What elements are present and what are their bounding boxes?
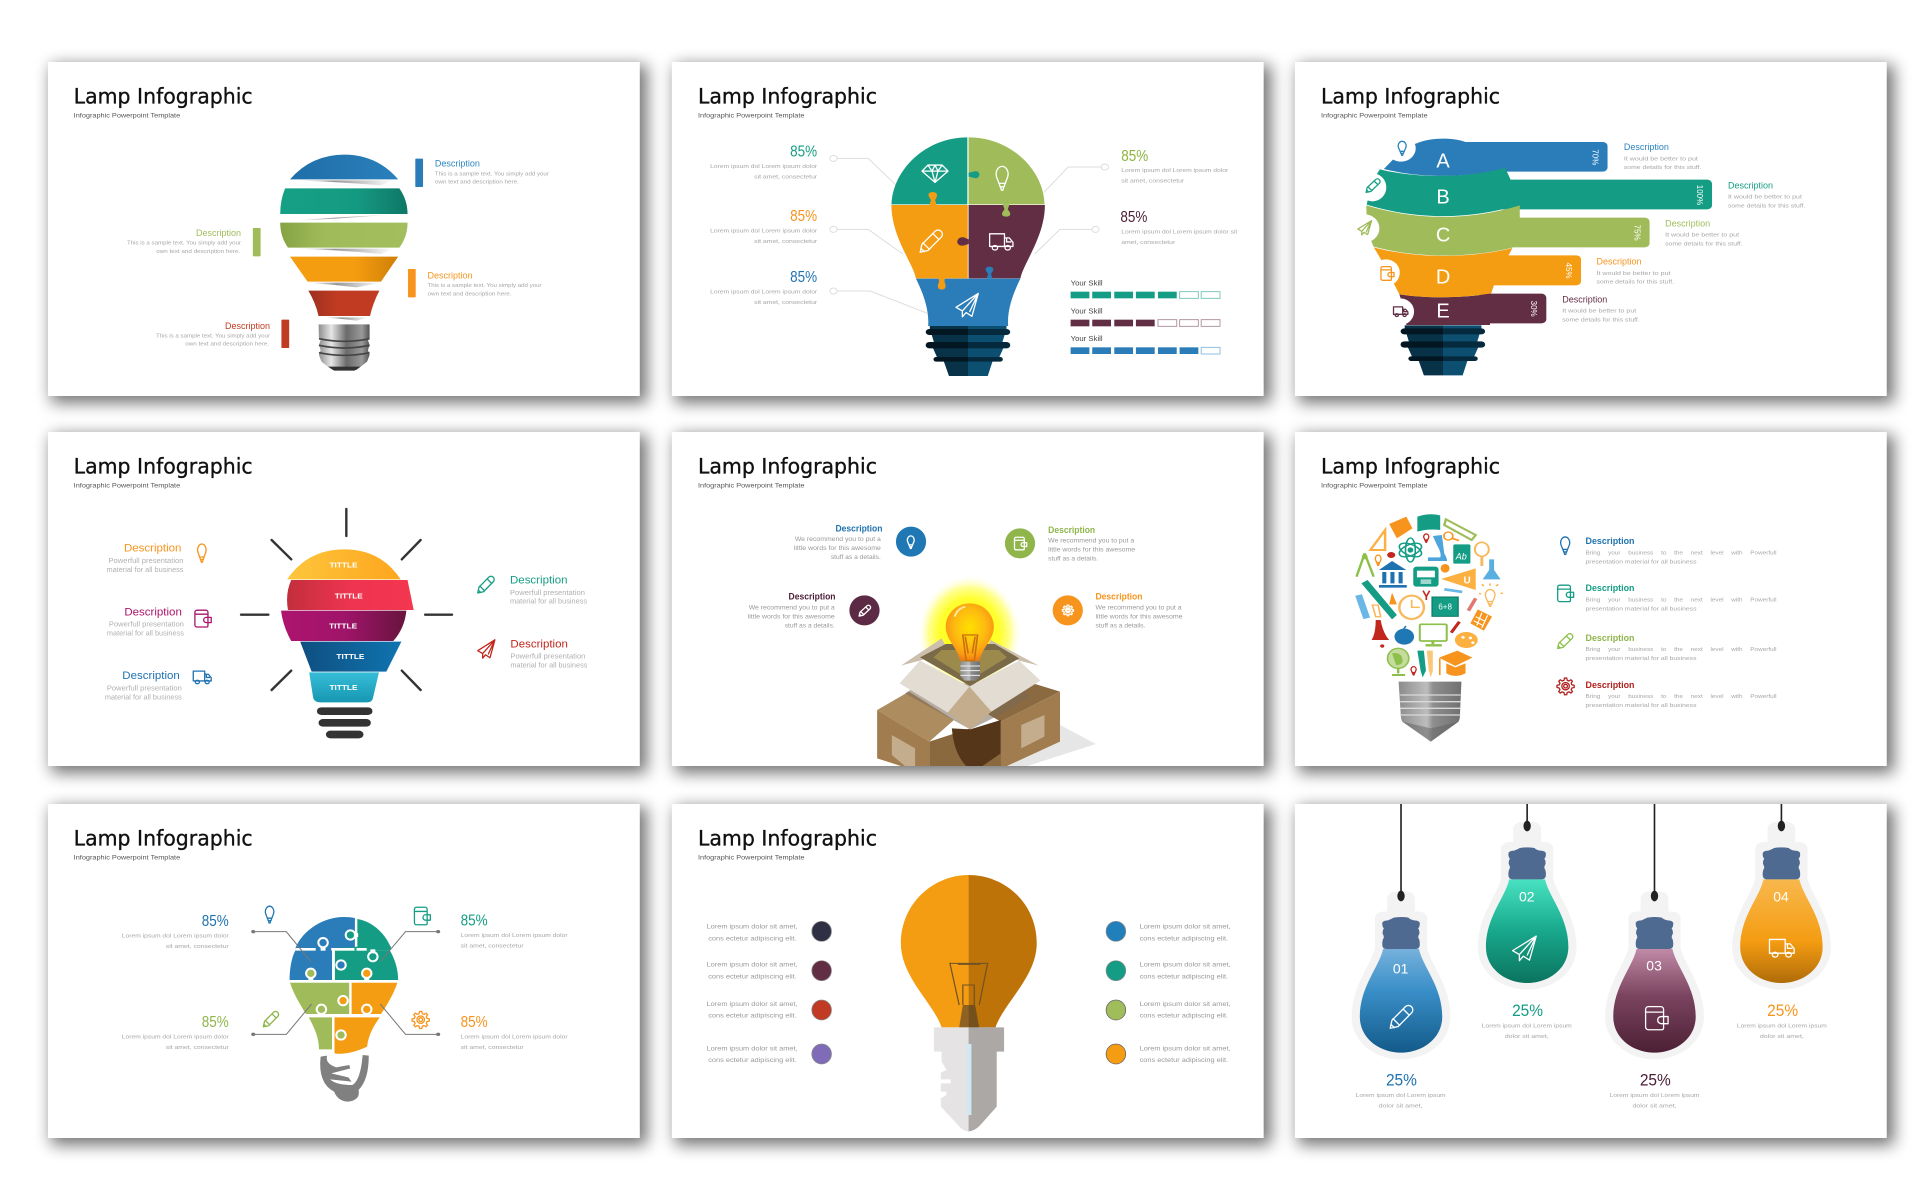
stat 03: Lorem ipsum dol Lorem ipsum <box>1609 1093 1700 1099</box>
hanging bulb 01 <box>1360 804 1442 1053</box>
description: red <box>510 638 588 669</box>
description: magenta: material for all business <box>107 631 184 638</box>
bulb socket <box>926 326 1010 376</box>
stat: green: sit amet, consectetur <box>1121 179 1184 185</box>
description: red: Description <box>510 638 568 650</box>
segment labels: TITTLE <box>329 683 357 692</box>
description: teal <box>510 575 588 606</box>
skill bar: blue: Your Skill <box>1071 336 1103 343</box>
stat: orange: 85% <box>461 1014 488 1031</box>
bar labels: D <box>1436 266 1450 288</box>
icon: bulb <box>996 166 1008 190</box>
description: blue <box>105 670 182 701</box>
legend left 4: Lorem ipsum dolor sit amet, <box>707 1045 798 1052</box>
legend left 3 <box>707 1000 831 1020</box>
icon: gear <box>412 1011 429 1029</box>
title: Lamp Infographic <box>1321 84 1500 108</box>
hanging bulb 01: 01 <box>1393 960 1409 976</box>
stat: blue: Lorem ipsum dol Lorem ipsum dolor <box>710 289 817 295</box>
stat: blue: 85% <box>790 269 817 286</box>
callout: green description <box>127 228 261 256</box>
stat: orange: Lorem ipsum dol Lorem ipsum dolor <box>461 1034 568 1040</box>
item: green description: presentation material for all business <box>1586 656 1697 662</box>
stat: green: Lorem ipsum dol Lorem ipsum dolor <box>122 1034 229 1040</box>
description: red: material for all business <box>510 662 588 669</box>
hanging bulb 02 <box>1486 804 1568 983</box>
description: orange <box>1096 592 1183 629</box>
description B: It would be better to put <box>1728 195 1802 201</box>
item: teal description: presentation material for all business <box>1586 606 1697 612</box>
description: blue: material for all business <box>105 694 182 701</box>
stacked bulb <box>281 549 414 738</box>
icon: diamond <box>922 165 948 182</box>
description E: Description <box>1562 294 1607 304</box>
segment labels: TITTLE <box>335 591 363 600</box>
description: teal: material for all business <box>510 599 588 606</box>
puzzle bulb <box>891 137 1045 326</box>
description: orange: material for all business <box>106 567 184 574</box>
stat: teal: 85% <box>790 144 817 161</box>
stat 03: dolor sit amet, <box>1632 1104 1677 1110</box>
description: orange: stuff as a details. <box>1096 622 1146 629</box>
legend right 3 <box>1106 1000 1231 1020</box>
stat: teal: 85% <box>461 913 488 930</box>
icon: bulb <box>198 544 206 562</box>
description B: some details for this stuff. <box>1728 204 1806 210</box>
legend left 2 <box>707 961 831 981</box>
description C <box>1665 218 1743 247</box>
bar labels: 75% <box>1632 225 1641 241</box>
segment labels: TITTLE <box>329 621 357 630</box>
subtitle: Infographic Powerpoint Template <box>698 855 805 862</box>
description: plum <box>748 592 836 629</box>
description D: Description <box>1597 257 1642 267</box>
icon: wallet <box>414 907 430 925</box>
item: red description: presentation material for all business <box>1586 703 1697 709</box>
stat 04: 25% <box>1767 1002 1798 1020</box>
legend left 2: cons ectetur adipiscing elit. <box>708 973 797 980</box>
icon: small bulbs <box>1375 534 1495 675</box>
stat: teal: sit amet, consectetur <box>461 944 524 950</box>
description: orange <box>106 543 184 574</box>
description: plum: little words for this awesome <box>748 613 835 620</box>
stat: plum: Lorem ipsum dol Lorem ipsum dolor sit <box>1121 229 1238 235</box>
legend right 4: Lorem ipsum dolor sit amet, <box>1140 1045 1231 1052</box>
skill bar: teal: Your Skill <box>1071 280 1103 287</box>
segment labels: TITTLE <box>329 561 357 570</box>
stat 04: Lorem ipsum dol Lorem ipsum <box>1737 1023 1827 1029</box>
callout: red description: Description <box>225 321 270 331</box>
description D: some details for this stuff. <box>1597 280 1674 286</box>
legend right 4: cons ectetur adipiscing elit. <box>1140 1057 1228 1064</box>
stat: orange: Lorem ipsum dol Lorem ipsum dolor <box>710 228 817 234</box>
bulb layers <box>1350 135 1520 325</box>
item: red description: Description <box>1586 680 1635 690</box>
bar labels: A <box>1436 150 1450 172</box>
item: teal description: Description <box>1586 583 1635 593</box>
callout: blue description: own text and description here. <box>435 180 519 186</box>
item: green description <box>1558 633 1777 662</box>
description: red: Powerfull presentation <box>510 654 586 661</box>
bulb screw base <box>1399 682 1461 742</box>
stat: orange: sit amet, consectetur <box>461 1045 524 1051</box>
stat 01 <box>1356 1072 1446 1110</box>
key-shaped bulb <box>901 875 1037 1131</box>
callout: red description: own text and description here. <box>185 342 270 348</box>
title: Lamp Infographic <box>74 826 253 850</box>
subtitle: Infographic Powerpoint Template <box>74 113 181 120</box>
panel: stacked TITTLE bulb with rays <box>48 432 640 766</box>
stat 03 <box>1609 1072 1700 1110</box>
icon: bulb <box>1398 141 1406 155</box>
description: blue: stuff as a details. <box>831 554 881 561</box>
item: green description: Bring your business to the next level with Powerfull <box>1586 647 1777 653</box>
hanging bulb 04 <box>1740 804 1823 983</box>
cardboard box and bulb <box>877 576 1096 766</box>
description C: some details for this stuff. <box>1665 241 1743 247</box>
panel: school icons bulb <box>1295 432 1887 766</box>
callout: red description <box>156 320 289 348</box>
description: blue: little words for this awesome <box>794 545 881 552</box>
legend left 4 <box>707 1044 831 1064</box>
subtitle: Infographic Powerpoint Template <box>1321 113 1428 120</box>
stat 03: 25% <box>1640 1072 1671 1090</box>
legend right 1: cons ectetur adipiscing elit. <box>1140 935 1228 942</box>
title: Lamp Infographic <box>74 454 253 478</box>
skill bar: blue <box>1071 336 1220 354</box>
item: teal description <box>1558 583 1777 612</box>
panel: A to E bulb bars <box>1295 62 1887 396</box>
icon: paper plane <box>478 640 495 658</box>
panel: glowing bulb in cardboard box <box>672 432 1264 766</box>
stat 01: Lorem ipsum dol Lorem ipsum <box>1356 1093 1446 1099</box>
stat: teal <box>461 913 568 950</box>
stat: orange <box>710 208 817 245</box>
skill bar: plum: Your Skill <box>1071 308 1103 315</box>
panel: flat key bulb with dot legend <box>672 804 1264 1138</box>
legend right 2: Lorem ipsum dolor sit amet, <box>1140 962 1231 969</box>
bar labels: 70% <box>1590 149 1599 165</box>
description A: It would be better to put <box>1624 156 1698 162</box>
screw base <box>320 1055 369 1102</box>
title: Lamp Infographic <box>698 84 877 108</box>
bar labels <box>1436 149 1704 323</box>
stat: green <box>122 1014 229 1051</box>
panel: hanging bulbs <box>1295 804 1887 1138</box>
connector lines <box>830 155 1109 313</box>
item: blue description: presentation material for all business <box>1586 559 1697 565</box>
subtitle: Infographic Powerpoint Template <box>74 855 181 862</box>
description: green: We recommend you to put a <box>1048 538 1135 545</box>
callout: blue description: Description <box>435 159 480 169</box>
icon: pencil <box>478 576 494 593</box>
legend right 3: cons ectetur adipiscing elit. <box>1140 1013 1228 1020</box>
legend left 1: cons ectetur adipiscing elit. <box>708 935 797 942</box>
stat: orange: 85% <box>790 208 817 225</box>
item: teal description: Bring your business to the next level with Powerfull <box>1586 597 1777 603</box>
subtitle: Infographic Powerpoint Template <box>698 113 805 120</box>
legend left 1: Lorem ipsum dolor sit amet, <box>707 924 798 931</box>
item: green description: Description <box>1586 633 1635 643</box>
description A <box>1624 142 1702 171</box>
stat: plum <box>1120 209 1238 246</box>
title: Lamp Infographic <box>74 84 253 108</box>
jigsaw bulb <box>290 917 398 1054</box>
item: blue description: Bring your business to the next level with Powerfull <box>1586 550 1777 556</box>
bar labels: 30% <box>1529 301 1538 317</box>
description C: It would be better to put <box>1665 233 1740 239</box>
segment labels: TITTLE <box>336 652 364 661</box>
stat 02 <box>1482 1002 1572 1040</box>
description: blue: Description <box>835 523 883 534</box>
bar labels: B <box>1436 186 1450 208</box>
hanging bulb 03: 03 <box>1646 958 1662 974</box>
icon: truck <box>990 234 1013 250</box>
bar labels: C <box>1436 225 1450 247</box>
description: plum: stuff as a details. <box>785 622 835 629</box>
legend right 4 <box>1106 1044 1231 1064</box>
description: orange: Description <box>1096 592 1143 603</box>
stat 01: dolor sit amet, <box>1379 1104 1423 1110</box>
stat: blue: sit amet, consectetur <box>754 300 817 306</box>
panel: puzzle bulb with skill bars <box>672 62 1264 396</box>
title: Lamp Infographic <box>698 454 877 478</box>
icon: pencil <box>1366 179 1380 192</box>
stat: blue: sit amet, consectetur <box>166 944 229 950</box>
icon cluster: Ab <box>1455 551 1467 561</box>
icon: paper plane <box>956 293 978 317</box>
description: orange: little words for this awesome <box>1096 613 1183 620</box>
legend right 1: Lorem ipsum dolor sit amet, <box>1140 924 1231 931</box>
description: blue: We recommend you to put a <box>795 536 881 543</box>
legend left 3: Lorem ipsum dolor sit amet, <box>707 1001 798 1008</box>
description: orange: Description <box>124 543 181 555</box>
item: red description <box>1557 678 1777 709</box>
icon: wallet <box>195 610 211 627</box>
description: teal: Powerfull presentation <box>510 590 585 597</box>
segment labels <box>329 561 364 692</box>
panel: jigsaw bulb with connectors <box>48 804 640 1138</box>
icon: wallet <box>1381 267 1394 280</box>
subtitle: Infographic Powerpoint Template <box>698 483 805 490</box>
bar labels: E <box>1436 301 1450 323</box>
icon: pencil <box>920 230 942 252</box>
description: magenta <box>107 606 184 638</box>
stat: plum: amet, consectetur <box>1121 240 1175 246</box>
description: blue: Powerfull presentation <box>107 685 182 692</box>
icon: pencil <box>263 1011 279 1027</box>
bar labels: 100% <box>1695 185 1704 205</box>
description B <box>1728 181 1806 210</box>
description E <box>1562 294 1640 323</box>
icon badge: orange gear <box>1053 595 1083 625</box>
description: orange: We recommend you to put a <box>1096 604 1182 611</box>
sliced bulb illustration <box>280 155 408 371</box>
stat: teal <box>710 144 817 181</box>
hanging bulb 02: 02 <box>1519 888 1535 904</box>
icon cluster: 6+8 <box>1438 602 1452 611</box>
stat: green: Lorem ipsum dol Lorem ipsum dolor <box>1121 168 1228 174</box>
stat 04 <box>1737 1002 1827 1040</box>
callout: orange description <box>408 269 542 297</box>
description D <box>1597 257 1674 286</box>
legend left 3: cons ectetur adipiscing elit. <box>708 1013 797 1020</box>
callout: green description: own text and description here. <box>156 249 241 255</box>
stat: orange <box>461 1014 568 1051</box>
bulb socket <box>1401 325 1485 375</box>
description: green <box>1048 525 1136 563</box>
stat 02: dolor sit amet, <box>1505 1034 1549 1040</box>
description E: some details for this stuff. <box>1562 317 1640 323</box>
description: plum: We recommend you to put a <box>749 604 835 611</box>
description: plum: Description <box>789 592 836 603</box>
stat 04: dolor sit amet, <box>1760 1034 1804 1040</box>
description C: Description <box>1665 218 1710 228</box>
callout: green description: This is a sample text. You simply add your <box>127 241 241 247</box>
stat 02: 25% <box>1512 1002 1543 1020</box>
description: green: Description <box>1048 525 1095 536</box>
description: green: stuff as a details. <box>1048 556 1098 563</box>
subtitle: Infographic Powerpoint Template <box>1321 483 1428 490</box>
skill bar: plum <box>1071 308 1220 326</box>
skill bar: teal <box>1071 280 1220 298</box>
icon cluster: U <box>1464 575 1471 586</box>
description: teal: Description <box>510 575 567 587</box>
callout: orange description: own text and description here. <box>428 291 512 297</box>
stat 02: Lorem ipsum dol Lorem ipsum <box>1482 1023 1572 1029</box>
legend left 4: cons ectetur adipiscing elit. <box>708 1057 797 1064</box>
stat: blue <box>122 913 229 950</box>
subtitle: Infographic Powerpoint Template <box>74 483 181 490</box>
light rays <box>241 509 452 690</box>
stat: green <box>1121 148 1228 185</box>
icon badge: plum pencil <box>849 595 880 625</box>
icon: truck <box>1394 307 1408 316</box>
legend left 2: Lorem ipsum dolor sit amet, <box>707 962 798 969</box>
stat: green: sit amet, consectetur <box>166 1045 229 1051</box>
stat: blue: Lorem ipsum dol Lorem ipsum dolor <box>122 933 229 939</box>
title: Lamp Infographic <box>1321 454 1500 478</box>
stat: plum: 85% <box>1120 209 1147 226</box>
description: green: little words for this awesome <box>1048 547 1136 554</box>
icon: paper plane <box>1358 221 1372 235</box>
description E: It would be better to put <box>1562 308 1637 314</box>
stat: blue <box>710 269 817 306</box>
callout: orange description: This is a sample text. You simply add your <box>428 283 542 289</box>
legend right 1 <box>1106 921 1231 942</box>
bar labels: 45% <box>1564 263 1573 279</box>
connector lines <box>251 930 440 1036</box>
description D: It would be better to put <box>1597 271 1671 277</box>
icon badge: blue bulb <box>896 527 926 557</box>
description A: some details for this stuff. <box>1624 165 1702 171</box>
description B: Description <box>1728 181 1773 191</box>
item: blue description: Description <box>1586 536 1635 546</box>
description: blue <box>794 523 883 561</box>
item: red description: Bring your business to the next level with Powerfull <box>1586 694 1777 700</box>
title: Lamp Infographic <box>698 826 877 850</box>
icon: truck <box>193 671 211 684</box>
stat 01: 25% <box>1386 1072 1417 1090</box>
stat: teal: Lorem ipsum dol Lorem ipsum dolor <box>710 164 817 170</box>
stat: teal: Lorem ipsum dol Lorem ipsum dolor <box>461 933 568 939</box>
icon badge: green wallet <box>1005 528 1035 558</box>
hanging bulb 04: 04 <box>1773 888 1789 904</box>
stat: green: 85% <box>202 1014 229 1031</box>
icon: bulb <box>265 906 274 923</box>
description: magenta: Description <box>124 606 182 618</box>
legend right 2 <box>1106 961 1231 981</box>
description: blue: Description <box>122 670 180 682</box>
legend left 1 <box>707 921 831 942</box>
stat: orange: sit amet, consectetur <box>754 239 817 245</box>
description A: Description <box>1624 142 1669 152</box>
stat: blue: 85% <box>202 913 229 930</box>
stat: teal: sit amet, consectetur <box>754 175 817 181</box>
description: orange: Powerfull presentation <box>108 558 184 565</box>
callout: orange description: Description <box>428 270 473 280</box>
bars <box>1453 142 1712 323</box>
icon cluster <box>1357 514 1503 677</box>
stat: green: 85% <box>1121 148 1148 165</box>
callout: blue description <box>415 159 549 187</box>
legend right 3: Lorem ipsum dolor sit amet, <box>1140 1001 1231 1008</box>
callout: red description: This is a sample text. You simply add your <box>156 334 270 340</box>
callout: blue description: This is a sample text. You simply add your <box>435 171 549 177</box>
panel: sliced bulb with descriptions <box>48 62 640 396</box>
description: magenta: Powerfull presentation <box>109 622 184 629</box>
callout: green description: Description <box>196 228 241 238</box>
hanging bulb 03 <box>1613 804 1696 1053</box>
legend right 2: cons ectetur adipiscing elit. <box>1140 973 1228 980</box>
item: blue description <box>1561 536 1777 565</box>
